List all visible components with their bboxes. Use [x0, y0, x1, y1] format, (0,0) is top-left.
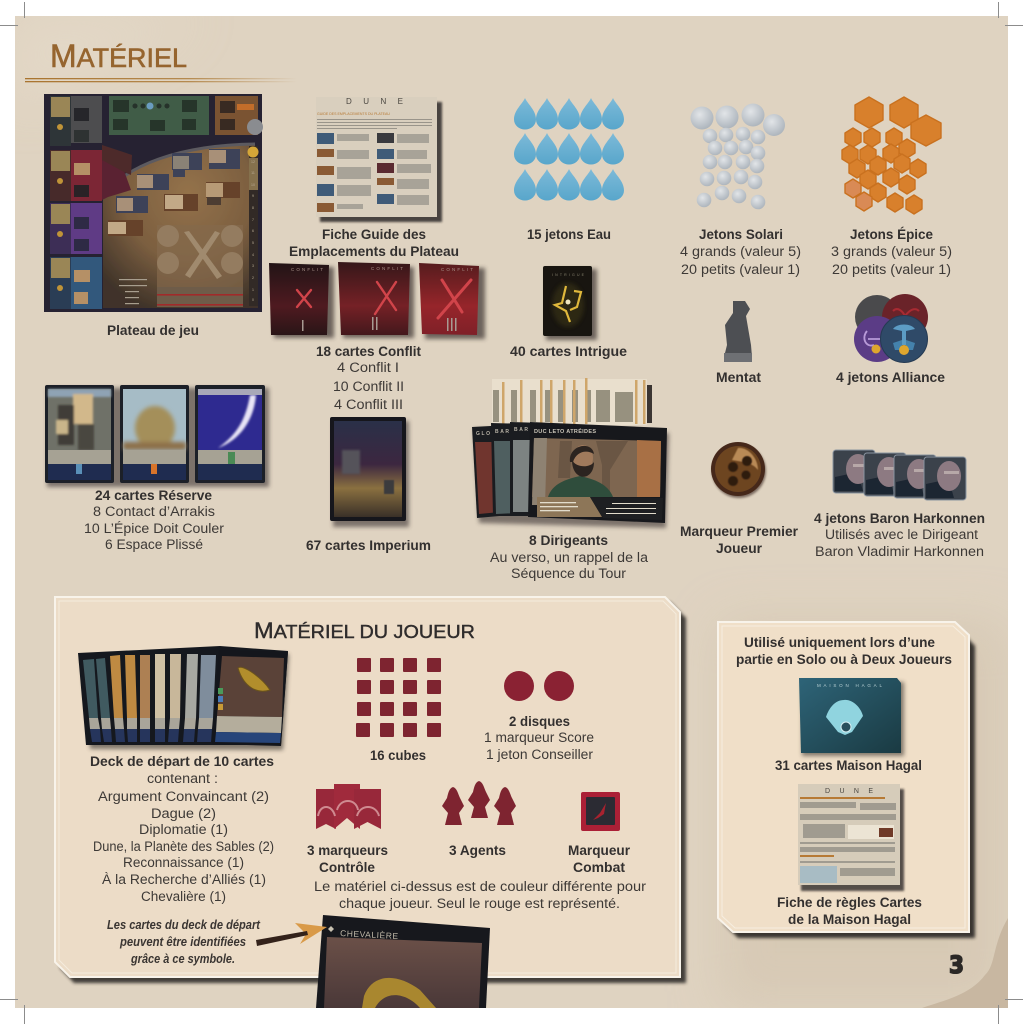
caption: 24 cartes Réserve: [84, 488, 225, 552]
deck caption: À la Recherche d’Alliés (1): [102, 872, 266, 887]
caption: 3 marqueurs Contrôle: 3 marqueurs: [307, 843, 388, 858]
Solari tokens: [690, 104, 785, 209]
cards: Dirigeants: GLO: [476, 431, 490, 437]
caption: 4 jetons Alliance: 4 jetons Alliance: [836, 370, 945, 385]
caption: 31 cartes Maison Hagal: 31 cartes Maison Hagal: [775, 758, 922, 773]
caption: Marqueur Premier Joueur: Joueur: [716, 541, 763, 556]
first player marker: [711, 442, 766, 498]
caption: 24 cartes Réserve: 8 Contact d’Arrakis: [93, 504, 215, 519]
board: player strips: [50, 96, 102, 309]
card: Contact d'Arrakis: [45, 385, 114, 483]
caption: 18 cartes Conflit: 4 Conflit III: [334, 397, 403, 412]
caption: 18 cartes Conflit: [316, 344, 421, 412]
board: Plateau de jeu: 11: [251, 171, 255, 175]
panel heading: MATÉRIEL DU JOUEUR: [254, 618, 475, 643]
discs: [504, 671, 574, 701]
caption: Plateau de jeu: Plateau de jeu: [107, 323, 199, 338]
cubes: [356, 658, 441, 737]
caption: Marqueur Premier Joueur: Marqueur Premier: [680, 524, 799, 539]
caption: Fiche de règles: de la Maison Hagal: [788, 912, 911, 927]
colour note: [314, 879, 647, 911]
board: green and brown panels: [109, 96, 209, 135]
colour note: chaque joueur. Seul le rouge est représenté.: [339, 896, 620, 911]
cards: Dirigeants: DUC LETO ATRÉIDES: [534, 427, 596, 435]
caption: Marqueur Combat: Combat: [573, 860, 626, 875]
sheet: Fiche Guide: GUIDE DES EMPLACEMENTS DU PLATEAU: [317, 111, 390, 116]
title: Matériel: MATÉRIEL: [50, 38, 187, 74]
caption: 4 jetons Baron Harkonnen: [814, 511, 985, 559]
caption: Jetons Épice: 3 grands (valeur 5): [831, 244, 952, 259]
starting deck fan: [78, 646, 289, 750]
caption: Jetons Solari: Jetons Solari: [699, 227, 783, 242]
board: Plateau de jeu: 3: [252, 264, 254, 268]
cards: Conflit: [269, 262, 485, 339]
reminder strips: [492, 378, 652, 425]
caption: Mentat: Mentat: [716, 370, 762, 385]
panel: Matériel du joueur: [55, 597, 686, 983]
caption: Jetons Épice: [831, 227, 952, 277]
caption: 40 cartes Intrigue: 40 cartes Intrigue: [510, 344, 628, 359]
sheet: Hagal rules: DUNE: [825, 788, 873, 795]
caption: Marqueur Combat: [568, 843, 631, 875]
caption: 15 jetons Eau: 15 jetons Eau: [527, 227, 611, 242]
alliance tokens: [854, 294, 928, 362]
caption: Jetons Solari: 20 petits (valeur 1): [681, 262, 800, 277]
caption: Jetons Épice: Jetons Épice: [850, 227, 933, 242]
sheet: Hagal rules: [798, 784, 904, 891]
deck caption: Argument Convaincant (2): [98, 789, 269, 804]
board: Plateau de jeu: [44, 94, 263, 312]
front leader card: [528, 422, 667, 523]
cards: Dirigeants: [472, 378, 669, 528]
caption: Marqueur Combat: Marqueur: [568, 843, 631, 858]
italic note: peuvent être identifiées: [119, 934, 246, 949]
caption: 18 cartes Conflit: 18 cartes Conflit: [316, 344, 421, 359]
solo heading: [736, 635, 952, 667]
card: L'Épice Doit Couler: [120, 385, 189, 483]
caption: Jetons Solari: 4 grands (valeur 5): [680, 244, 801, 259]
caption: 24 cartes Réserve: 10 L’Épice Doit Couler: [84, 521, 225, 536]
caption: 4 jetons Baron Harkonnen: Baron Vladimir Harkonnen: [815, 544, 984, 559]
card: Maison Hagal: [799, 678, 904, 756]
cards: Dirigeants: BAR: [495, 429, 509, 435]
board: locations: [108, 149, 240, 236]
board: conflict area: [157, 225, 243, 307]
sheet: Fiche Guide: DUNE: [346, 97, 403, 106]
caption: 8 Dirigeants: Séquence du Tour: [511, 566, 627, 581]
arrow: [256, 923, 327, 946]
spice tokens: [842, 97, 941, 214]
page number: 3: [949, 951, 964, 979]
deck caption: contenant :: [147, 771, 218, 786]
deck caption: Dune, la Planète des Sables (2): [93, 839, 274, 854]
cards: Conflit: CONFLIT: [371, 266, 403, 271]
deck caption: Deck de départ de 10 cartes: [90, 754, 274, 769]
caption: 2 disques: 2 disques: [509, 714, 570, 729]
board: red wedge: [102, 157, 131, 200]
board: Plateau de jeu: 1: [252, 288, 254, 292]
caption: 2 disques: [484, 714, 594, 762]
card: Chevalière enlarged: [316, 915, 490, 1008]
caption: 2 disques: 1 jeton Conseiller: [486, 747, 594, 762]
front card: Chevalière: [212, 650, 288, 746]
caption: 67 cartes Imperium: 67 cartes Imperium: [306, 538, 431, 553]
Baron Harkonnen tokens: [833, 450, 966, 500]
caption: 16 cubes: 16 cubes: [370, 748, 426, 763]
caption: 4 jetons Baron Harkonnen: 4 jetons Baron Harkonnen: [814, 511, 985, 526]
caption: Fiche Guide: [289, 227, 459, 259]
board: Plateau de jeu: 10: [251, 183, 255, 187]
caption: 8 Dirigeants: [490, 533, 649, 581]
caption: 18 cartes Conflit: 10 Conflit II: [333, 379, 404, 394]
card: Chevalière enlarged: CHEVALIÈRE: [340, 928, 399, 941]
combat marker: [581, 792, 620, 831]
caption: 24 cartes Réserve: 24 cartes Réserve: [95, 488, 212, 503]
solo heading: partie en Solo ou à Deux Joueurs: [736, 652, 952, 667]
caption: 18 cartes Conflit: 4 Conflit I: [337, 360, 399, 375]
caption: Marqueur Premier Joueur: [680, 524, 799, 556]
card: Imperium: [330, 417, 409, 527]
cards: Conflit: CONFLIT: [291, 267, 323, 272]
card: Espace Plissé: [195, 385, 265, 483]
caption: Fiche de règles: [777, 895, 922, 927]
card: Maison Hagal: MAISON HAGAL: [817, 683, 882, 688]
solo heading: Utilisé uniquement lors d’une: [744, 635, 935, 650]
board: Plateau de jeu: 12: [251, 160, 255, 164]
board: score track: [249, 146, 258, 306]
deck caption: Reconnaissance (1): [123, 855, 244, 870]
water tokens: [514, 98, 624, 200]
deck caption: Diplomatie (1): [139, 822, 228, 837]
card: Intrigue: [543, 266, 597, 340]
caption: Fiche de règles: Fiche de règles Cartes: [777, 895, 922, 910]
caption: 4 jetons Baron Harkonnen: Utilisés avec le Dirigeant: [825, 527, 978, 542]
cards: Dirigeants: BAR: [514, 427, 528, 433]
caption: 8 Dirigeants: 8 Dirigeants: [529, 533, 608, 548]
caption: 8 Dirigeants: Au verso, un rappel de la: [490, 550, 649, 565]
board: Plateau de jeu: 4: [252, 253, 254, 257]
board: Plateau de jeu: 7: [252, 218, 254, 222]
italic note: Les cartes du deck de départ: [107, 917, 261, 932]
board: Plateau de jeu: 0: [252, 298, 254, 302]
sheet: Fiche Guide: [316, 97, 442, 222]
caption: 2 disques: 1 marqueur Score: [484, 730, 594, 745]
caption: Jetons Épice: 20 petits (valeur 1): [832, 262, 951, 277]
board: Plateau de jeu: 6: [252, 229, 254, 233]
italic note: [107, 917, 261, 966]
agents: [442, 781, 516, 825]
caption: 24 cartes Réserve: 6 Espace Plissé: [105, 537, 203, 552]
italic note: grâce à ce symbole.: [130, 951, 235, 966]
panel: Solo: [718, 622, 975, 938]
caption: Fiche Guide: Fiche Guide des: [322, 227, 426, 242]
board: Plateau de jeu: 9: [252, 194, 254, 198]
cards: Conflit: CONFLIT: [441, 267, 473, 272]
deck caption: [90, 754, 274, 904]
back leader cards: [472, 425, 510, 518]
caption: Jetons Solari: [680, 227, 801, 277]
control markers: [316, 784, 381, 829]
deck caption: Chevalière (1): [141, 889, 226, 904]
mentat figure: [724, 301, 752, 362]
cards: Réserve: [45, 385, 269, 487]
colour note: Le matériel ci-dessus est de couleur différente pour: [314, 879, 647, 894]
caption: 3 marqueurs Contrôle: Contrôle: [319, 860, 375, 875]
deck caption: Dague (2): [151, 806, 216, 821]
board: Plateau de jeu: 2: [252, 276, 254, 280]
board: Plateau de jeu: 5: [252, 241, 254, 245]
caption: 3 marqueurs Contrôle: [307, 843, 388, 875]
card: Intrigue: INTRIGUE: [552, 273, 585, 277]
board: Plateau de jeu: 8: [252, 206, 254, 210]
caption: Fiche Guide: Emplacements du Plateau: [289, 244, 459, 259]
caption: 3 Agents: 3 Agents: [449, 843, 506, 858]
